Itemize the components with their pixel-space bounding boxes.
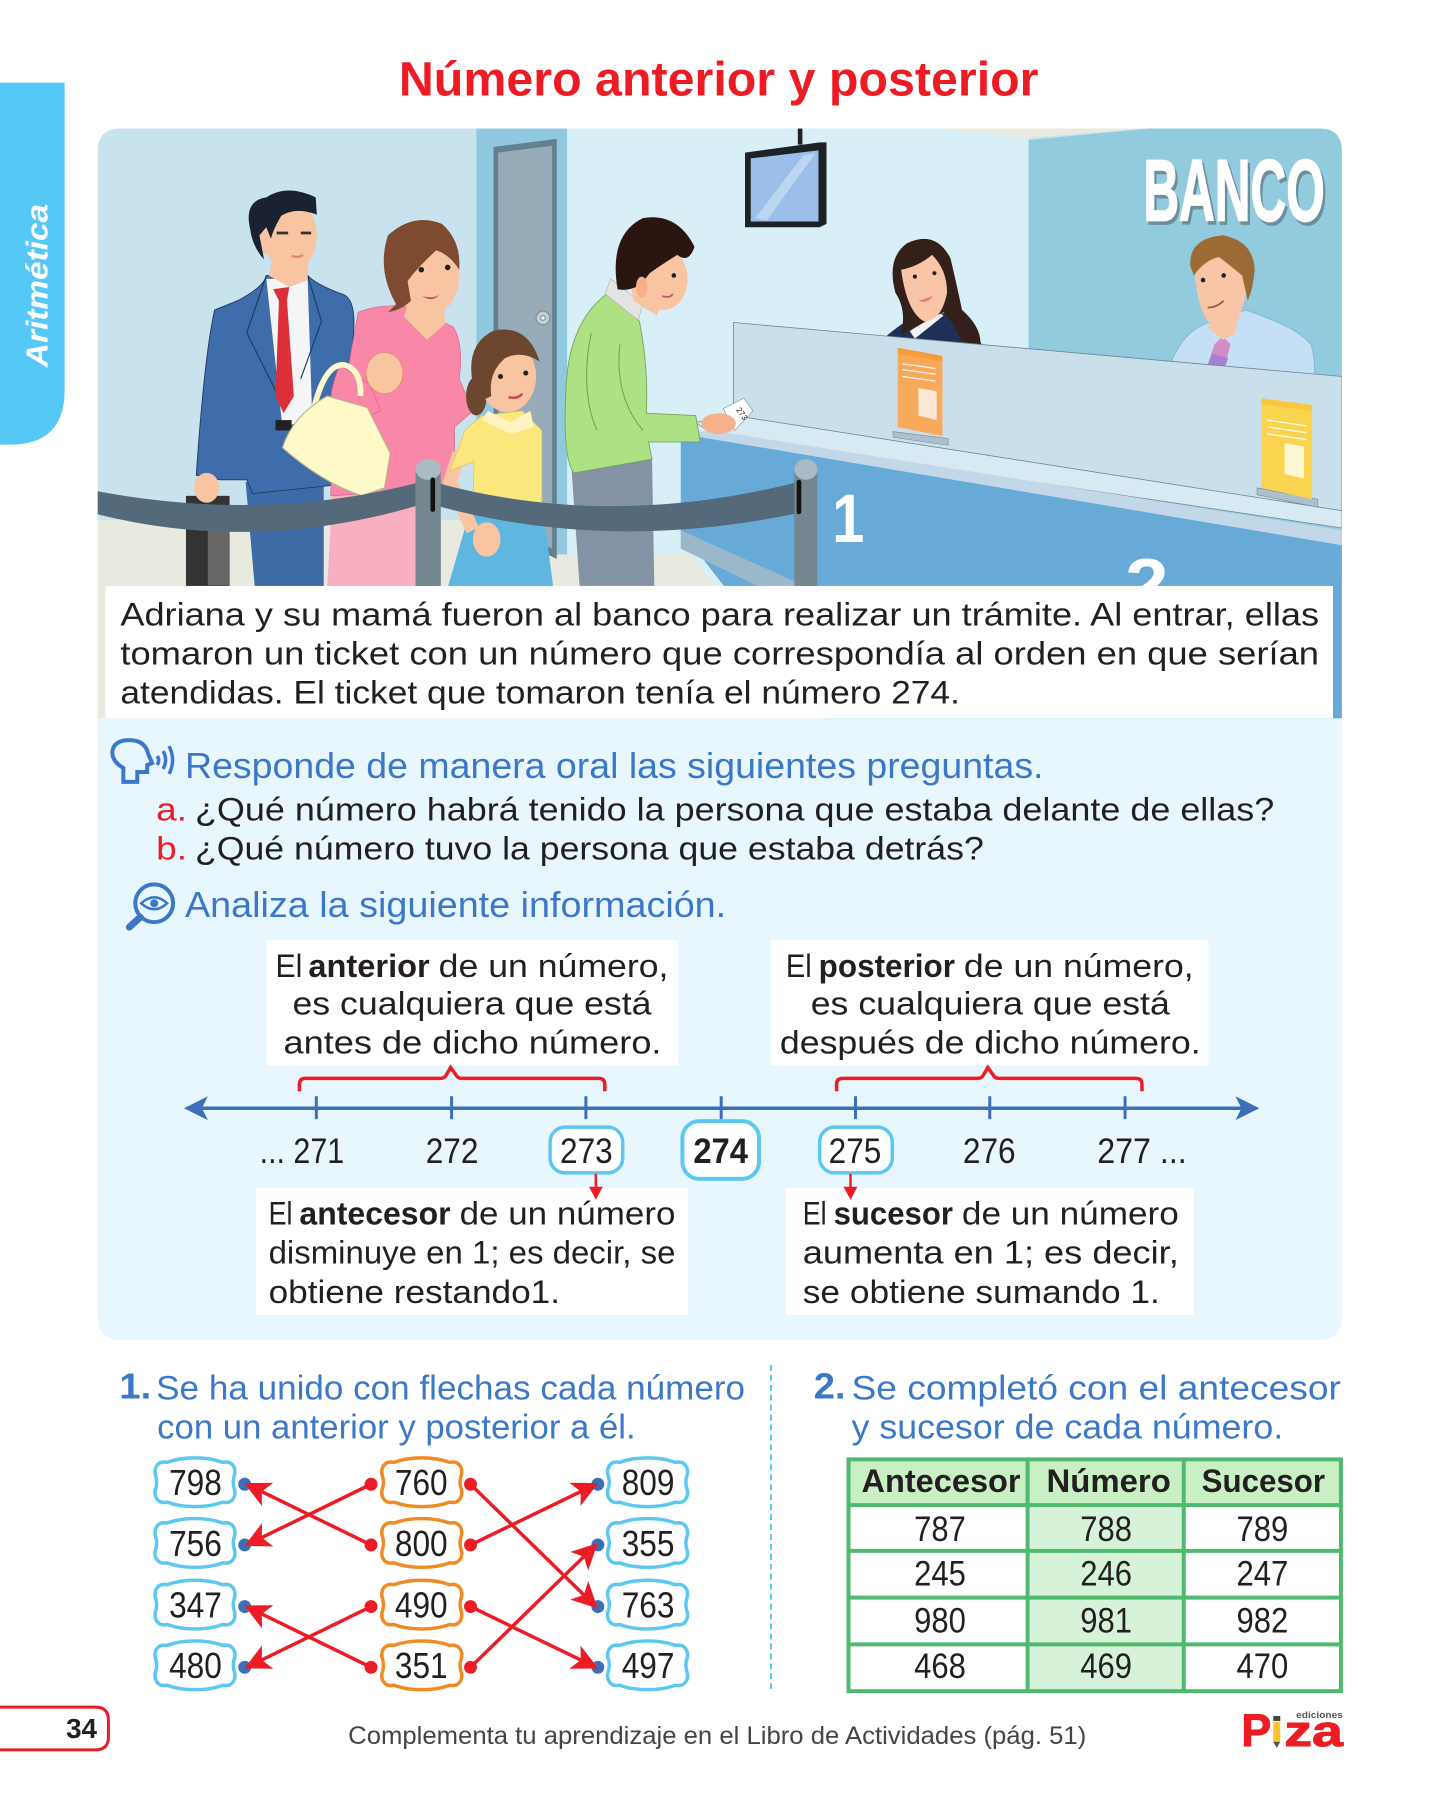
number labels: 497 bbox=[622, 1646, 674, 1686]
number line: 273 bbox=[560, 1132, 613, 1171]
boy in green sweater with ticket: 273 bbox=[734, 406, 750, 422]
results table: 788 bbox=[1080, 1510, 1132, 1549]
partition and counter bbox=[681, 323, 1342, 719]
callout: antecesor bbox=[256, 1188, 688, 1315]
exercise 2 heading bbox=[814, 1367, 1341, 1446]
number line: 274 bbox=[693, 1132, 749, 1171]
number labels: 490 bbox=[395, 1586, 448, 1626]
callout: antecesor: antecesor bbox=[299, 1195, 451, 1232]
exercise 2 heading: 2. bbox=[814, 1367, 846, 1407]
callout: antecesor: obtiene restando1. bbox=[269, 1273, 560, 1310]
results table: 981 bbox=[1080, 1601, 1132, 1640]
callout: posterior: posterior bbox=[819, 947, 955, 984]
callout: posterior bbox=[771, 940, 1209, 1065]
number labels: 355 bbox=[622, 1524, 674, 1564]
logo: Piza ediciones bbox=[1241, 1705, 1344, 1756]
callout: anterior: anterior bbox=[308, 947, 430, 984]
number line: ... 271 bbox=[260, 1132, 344, 1171]
illustration: bank scene bbox=[98, 129, 1342, 719]
results table: Número bbox=[1046, 1462, 1171, 1499]
number labels: 756 bbox=[169, 1524, 222, 1564]
number labels: 798 bbox=[169, 1463, 222, 1503]
callout: anterior bbox=[267, 940, 678, 1065]
title: Número anterior y posterior bbox=[399, 54, 1039, 107]
callout: antecesor: de un número bbox=[460, 1195, 675, 1232]
logo: Piza ediciones: ediciones bbox=[1296, 1710, 1343, 1720]
door bbox=[494, 139, 557, 559]
results table: 247 bbox=[1236, 1555, 1288, 1594]
orange sign bbox=[893, 348, 948, 445]
callout: posterior: de un número, bbox=[964, 947, 1194, 984]
teller man bbox=[1171, 235, 1315, 376]
callout: sucesor: se obtiene sumando 1. bbox=[803, 1273, 1160, 1310]
matching exercise bbox=[155, 1458, 688, 1690]
girl in yellow shirt bbox=[448, 330, 553, 588]
number labels: 347 bbox=[169, 1586, 222, 1626]
man in blue suit bbox=[186, 191, 354, 588]
yellow sign bbox=[1257, 398, 1318, 507]
question b: b. bbox=[156, 830, 187, 867]
callout: posterior: después de dicho número. bbox=[780, 1023, 1201, 1060]
arrow: 275 to sucesor bbox=[844, 1174, 857, 1200]
callout: antecesor: El bbox=[269, 1195, 292, 1232]
results table: 469 bbox=[1080, 1647, 1132, 1686]
exercise 1 heading: Se ha unido con flechas cada número bbox=[156, 1370, 745, 1408]
results table: 468 bbox=[914, 1647, 966, 1686]
panel: information bbox=[97, 718, 1342, 1340]
callout: antecesor: disminuye en 1; es decir, se bbox=[269, 1233, 675, 1270]
counter number 1: 1 bbox=[832, 480, 864, 557]
teller woman bbox=[886, 239, 981, 344]
number labels: 800 bbox=[395, 1524, 448, 1564]
side tab: Aritmética bbox=[0, 83, 65, 445]
woman in pink with handbag bbox=[282, 220, 473, 588]
exercise 1 heading: 1. bbox=[119, 1367, 151, 1407]
question a: ¿Qué número habrá tenido la persona que estaba delante de ellas? bbox=[195, 791, 1274, 828]
divider between exercises bbox=[770, 1365, 772, 1693]
left column numbers bbox=[155, 1458, 235, 1690]
middle column numbers bbox=[382, 1458, 462, 1690]
queue barrier: posts and belts bbox=[98, 459, 817, 590]
results table: 470 bbox=[1236, 1647, 1288, 1686]
counter number 2: 2 bbox=[1125, 545, 1169, 624]
icon: speaking head bbox=[112, 740, 173, 782]
icon: magnifier with eye bbox=[129, 884, 173, 927]
heading: analyse: Analiza la siguiente información. bbox=[185, 885, 726, 925]
footer note: Complementa tu aprendizaje en el Libro de Actividades (pág. 51) bbox=[348, 1722, 1086, 1750]
exercise 1 heading: con un anterior y posterior a él. bbox=[157, 1408, 636, 1446]
bracket: anterior numbers bbox=[299, 1067, 605, 1091]
callout: anterior: de un número, bbox=[439, 947, 668, 984]
results table: 789 bbox=[1236, 1510, 1288, 1549]
number line bbox=[184, 1096, 1259, 1179]
number line: 277 ... bbox=[1097, 1132, 1187, 1171]
callout: sucesor bbox=[786, 1188, 1194, 1315]
side tab: Aritmética: Aritmética bbox=[20, 204, 55, 368]
number labels: 480 bbox=[169, 1646, 222, 1686]
exercise 2 heading: y sucesor de cada número. bbox=[852, 1408, 1283, 1446]
number line: 276 bbox=[963, 1132, 1016, 1171]
results table: Sucesor bbox=[1202, 1462, 1325, 1499]
question b: ¿Qué número tuvo la persona que estaba detrás? bbox=[195, 830, 984, 867]
number labels: 763 bbox=[622, 1586, 674, 1626]
number line: 275 bbox=[829, 1132, 881, 1171]
red arrows bbox=[247, 1484, 596, 1667]
exercise 1 heading bbox=[119, 1367, 745, 1446]
heading: oral questions: Responde de manera oral las siguientes preguntas. bbox=[185, 746, 1043, 786]
right column numbers bbox=[608, 1458, 688, 1690]
page number tab: 34 bbox=[66, 1713, 98, 1744]
number labels: 809 bbox=[622, 1463, 674, 1503]
callout: sucesor: El bbox=[803, 1195, 827, 1232]
callout: sucesor: sucesor bbox=[834, 1195, 953, 1232]
callout: anterior: El bbox=[276, 947, 302, 984]
callout: sucesor: aumenta en 1; es decir, bbox=[803, 1233, 1179, 1270]
exercise 2 heading: Se completó con el antecesor bbox=[852, 1370, 1341, 1408]
logo: Piza ediciones: P bbox=[1241, 1705, 1271, 1756]
number line: 272 bbox=[426, 1132, 478, 1171]
arrow: 273 to antecesor bbox=[589, 1174, 603, 1200]
BANCO sign bbox=[1146, 158, 1326, 226]
results table: 982 bbox=[1236, 1601, 1288, 1640]
story text box: atendidas. El ticket que tomaron tenía el número 274. bbox=[120, 673, 960, 710]
results table: 246 bbox=[1080, 1555, 1132, 1594]
results table: Antecesor bbox=[861, 1462, 1021, 1499]
number labels: 760 bbox=[395, 1463, 448, 1503]
page number tab bbox=[0, 1707, 108, 1750]
results table bbox=[849, 1459, 1341, 1691]
connector dots bbox=[238, 1478, 604, 1674]
story text box bbox=[105, 586, 1333, 718]
bracket: posterior numbers bbox=[837, 1067, 1142, 1091]
question a: a. bbox=[156, 791, 187, 828]
callout: sucesor: de un número bbox=[962, 1195, 1179, 1232]
number labels bbox=[169, 1463, 674, 1686]
story text box: tomaron un ticket con un número que correspondía al orden en que serían bbox=[120, 635, 1319, 672]
results table: 980 bbox=[914, 1601, 966, 1640]
results table: 245 bbox=[914, 1555, 966, 1594]
callout: posterior: es cualquiera que está bbox=[811, 985, 1171, 1022]
number labels: 351 bbox=[395, 1646, 448, 1686]
monitor bbox=[745, 129, 827, 227]
boy in green sweater with ticket bbox=[565, 217, 753, 588]
callout: posterior: El bbox=[786, 947, 812, 984]
story text box: Adriana y su mamá fueron al banco para realizar un trámite. Al entrar, ellas bbox=[120, 596, 1319, 633]
callout: anterior: es cualquiera que está bbox=[292, 985, 652, 1022]
results table: 787 bbox=[914, 1510, 966, 1549]
callout: anterior: antes de dicho número. bbox=[284, 1023, 662, 1060]
logo: Piza ediciones: za bbox=[1284, 1707, 1344, 1756]
